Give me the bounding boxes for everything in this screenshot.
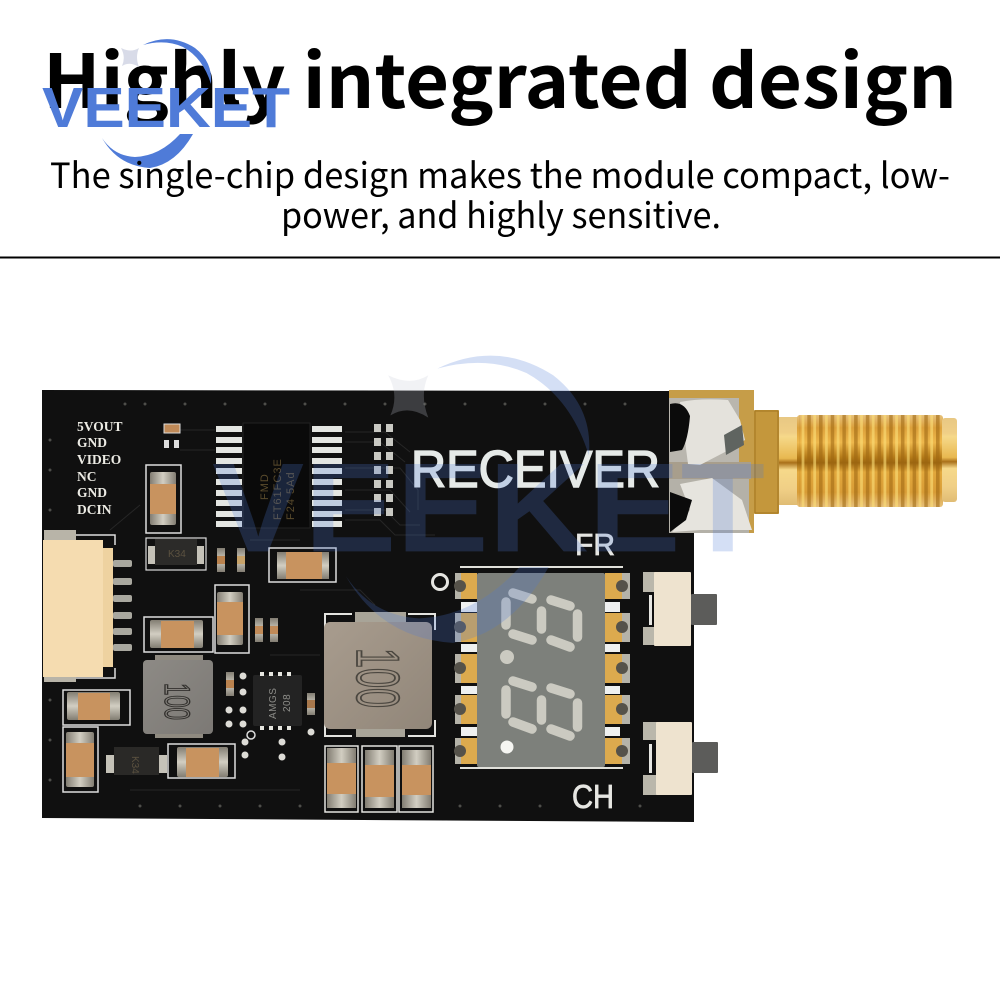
- large inductor 100: 100: [344, 648, 411, 708]
- antenna solder pads: [669, 390, 754, 533]
- QFN chip AMGS 208: AMGS: [268, 688, 279, 719]
- QFN chip AMGS 208: [253, 672, 302, 730]
- three capacitors bottom: [325, 746, 433, 812]
- capacitor: [168, 744, 235, 778]
- board label CH: CH: [572, 778, 614, 815]
- FR slide switch: [643, 572, 717, 646]
- white pin connector: [43, 530, 132, 682]
- pin labels: GND: [77, 435, 107, 450]
- board traces: [110, 430, 435, 790]
- logo watermark: over product: [212, 356, 765, 643]
- marker O: [432, 574, 448, 590]
- title: Highly integrated design: [43, 23, 957, 130]
- IC chip with pins: F24 5Ad: [285, 471, 297, 520]
- logo watermark: over product: VEEKET: [212, 436, 765, 578]
- logo watermark: header: VEEKET: [42, 76, 290, 140]
- subtitle: The single-chip design makes the module compact, low-: [50, 148, 950, 199]
- small inductor 100: 100: [157, 683, 196, 720]
- IC chip with pins: FMD: [259, 473, 271, 500]
- subtitle: [50, 148, 950, 239]
- pin labels: [77, 419, 122, 517]
- pin labels: DCIN: [77, 502, 112, 517]
- logo watermark: header: [42, 39, 290, 168]
- seven segment display: [454, 567, 630, 768]
- vias: [48, 402, 642, 808]
- small components top: [164, 424, 393, 516]
- IC chip with pins: FT61FC3E: [272, 458, 284, 520]
- diode K34: K34: [168, 549, 186, 560]
- capacitor: [144, 617, 213, 652]
- QFN chip AMGS 208: 208: [282, 694, 293, 712]
- CH slide switch: [643, 722, 718, 795]
- pin labels: 5VOUT: [77, 419, 122, 434]
- diode K34: [106, 747, 167, 775]
- capacitor: [269, 548, 336, 582]
- capacitor: [63, 690, 130, 725]
- small inductor 100: [143, 655, 213, 738]
- product photo: video receiver module: [42, 356, 957, 822]
- pin labels: NC: [77, 469, 96, 484]
- small resistors: [217, 548, 278, 642]
- circuit board: [42, 390, 694, 822]
- small passives around QFN: [226, 672, 315, 760]
- pin labels: VIDEO: [77, 452, 121, 467]
- SMA antenna connector: [754, 410, 957, 514]
- pin labels: GND: [77, 485, 107, 500]
- capacitor: [63, 727, 98, 792]
- diode K34: K34: [129, 756, 140, 774]
- board label FR: FR: [575, 527, 615, 562]
- large inductor 100: [324, 612, 435, 737]
- diode K34: [146, 538, 206, 570]
- subtitle: power, and highly sensitive.: [281, 188, 721, 239]
- capacitor: [215, 585, 249, 653]
- board label RECEIVER: RECEIVER: [411, 441, 660, 499]
- capacitor: [146, 465, 181, 533]
- IC chip with pins: [216, 423, 342, 528]
